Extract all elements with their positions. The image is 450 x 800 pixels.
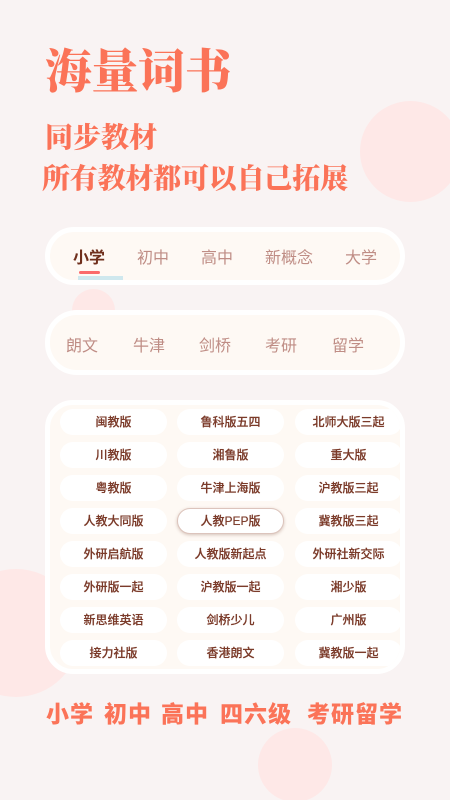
edition list: 外研启航版 <box>83 547 144 561</box>
edition list: 湘少版 <box>330 580 366 594</box>
edition list: 牛津上海版 <box>200 481 260 495</box>
tab: postgraduate: 考研 <box>265 338 297 355</box>
title: 海量词书 <box>45 47 231 99</box>
edition list: 外研社新交际 <box>312 547 384 561</box>
level: junior high: 初中 <box>104 701 152 727</box>
panel: school level tabs <box>45 227 405 285</box>
edition list: 沪教版三起 <box>318 481 378 495</box>
tab: senior high: 高中 <box>201 250 233 267</box>
tab indicator <box>79 271 100 274</box>
edition list: 香港朗文 <box>206 646 254 660</box>
tab: new concept: 新概念 <box>265 250 313 267</box>
circle: bottom left <box>0 569 80 697</box>
edition list: 沪教版一起 <box>200 580 260 594</box>
footer: school levels <box>46 701 403 727</box>
tab: university: 大学 <box>345 250 377 267</box>
subtitle: extendable textbooks: 所有教材都可以自己拓展 <box>42 164 348 195</box>
level: postgraduate and abroad: 考研留学 <box>307 701 403 727</box>
thumbnail sliver <box>78 276 123 280</box>
tab: cambridge: 剑桥 <box>199 338 231 355</box>
subtitle: synchronized textbooks: 同步教材 <box>45 123 157 154</box>
edition list: 冀教版三起 <box>318 514 378 528</box>
tab: oxford: 牛津 <box>133 338 165 355</box>
edition list: 湘鲁版 <box>212 448 248 462</box>
edition list: 人教PEP版 <box>200 514 260 528</box>
tab: read aloud: 朗文 <box>66 338 98 355</box>
edition list: 冀教版一起 <box>318 646 378 660</box>
level: senior high: 高中 <box>161 701 209 727</box>
circle: bottom <box>258 728 332 800</box>
edition list: 新思维英语 <box>83 613 144 627</box>
edition list: 接力社版 <box>89 646 138 660</box>
level: CET 4/6: 四六级 <box>220 701 292 727</box>
edition list: 人教大同版 <box>83 514 144 528</box>
edition list: 鲁科版五四 <box>200 415 260 429</box>
edition list: 重大版 <box>330 448 366 462</box>
panel: textbook editions <box>45 400 405 674</box>
tab: primary school selected: 小学 <box>73 250 105 267</box>
edition list: 剑桥少儿 <box>206 613 254 627</box>
edition list: 川教版 <box>95 448 132 462</box>
edition list <box>60 409 400 666</box>
circle: top right <box>360 101 450 202</box>
edition list: 外研版一起 <box>83 580 144 594</box>
level: primary school: 小学 <box>46 701 94 727</box>
tab: junior high: 初中 <box>137 250 169 267</box>
panel: other category tabs <box>45 310 405 375</box>
edition list: 粤教版 <box>95 481 132 495</box>
edition list: 北师大版三起 <box>312 415 384 429</box>
edition list: 广州版 <box>330 613 366 627</box>
edition list: 闽教版 <box>95 415 132 429</box>
circle: small behind tabs <box>72 289 115 332</box>
tab: study abroad: 留学 <box>332 338 364 355</box>
edition list: 人教版新起点 <box>194 547 266 561</box>
